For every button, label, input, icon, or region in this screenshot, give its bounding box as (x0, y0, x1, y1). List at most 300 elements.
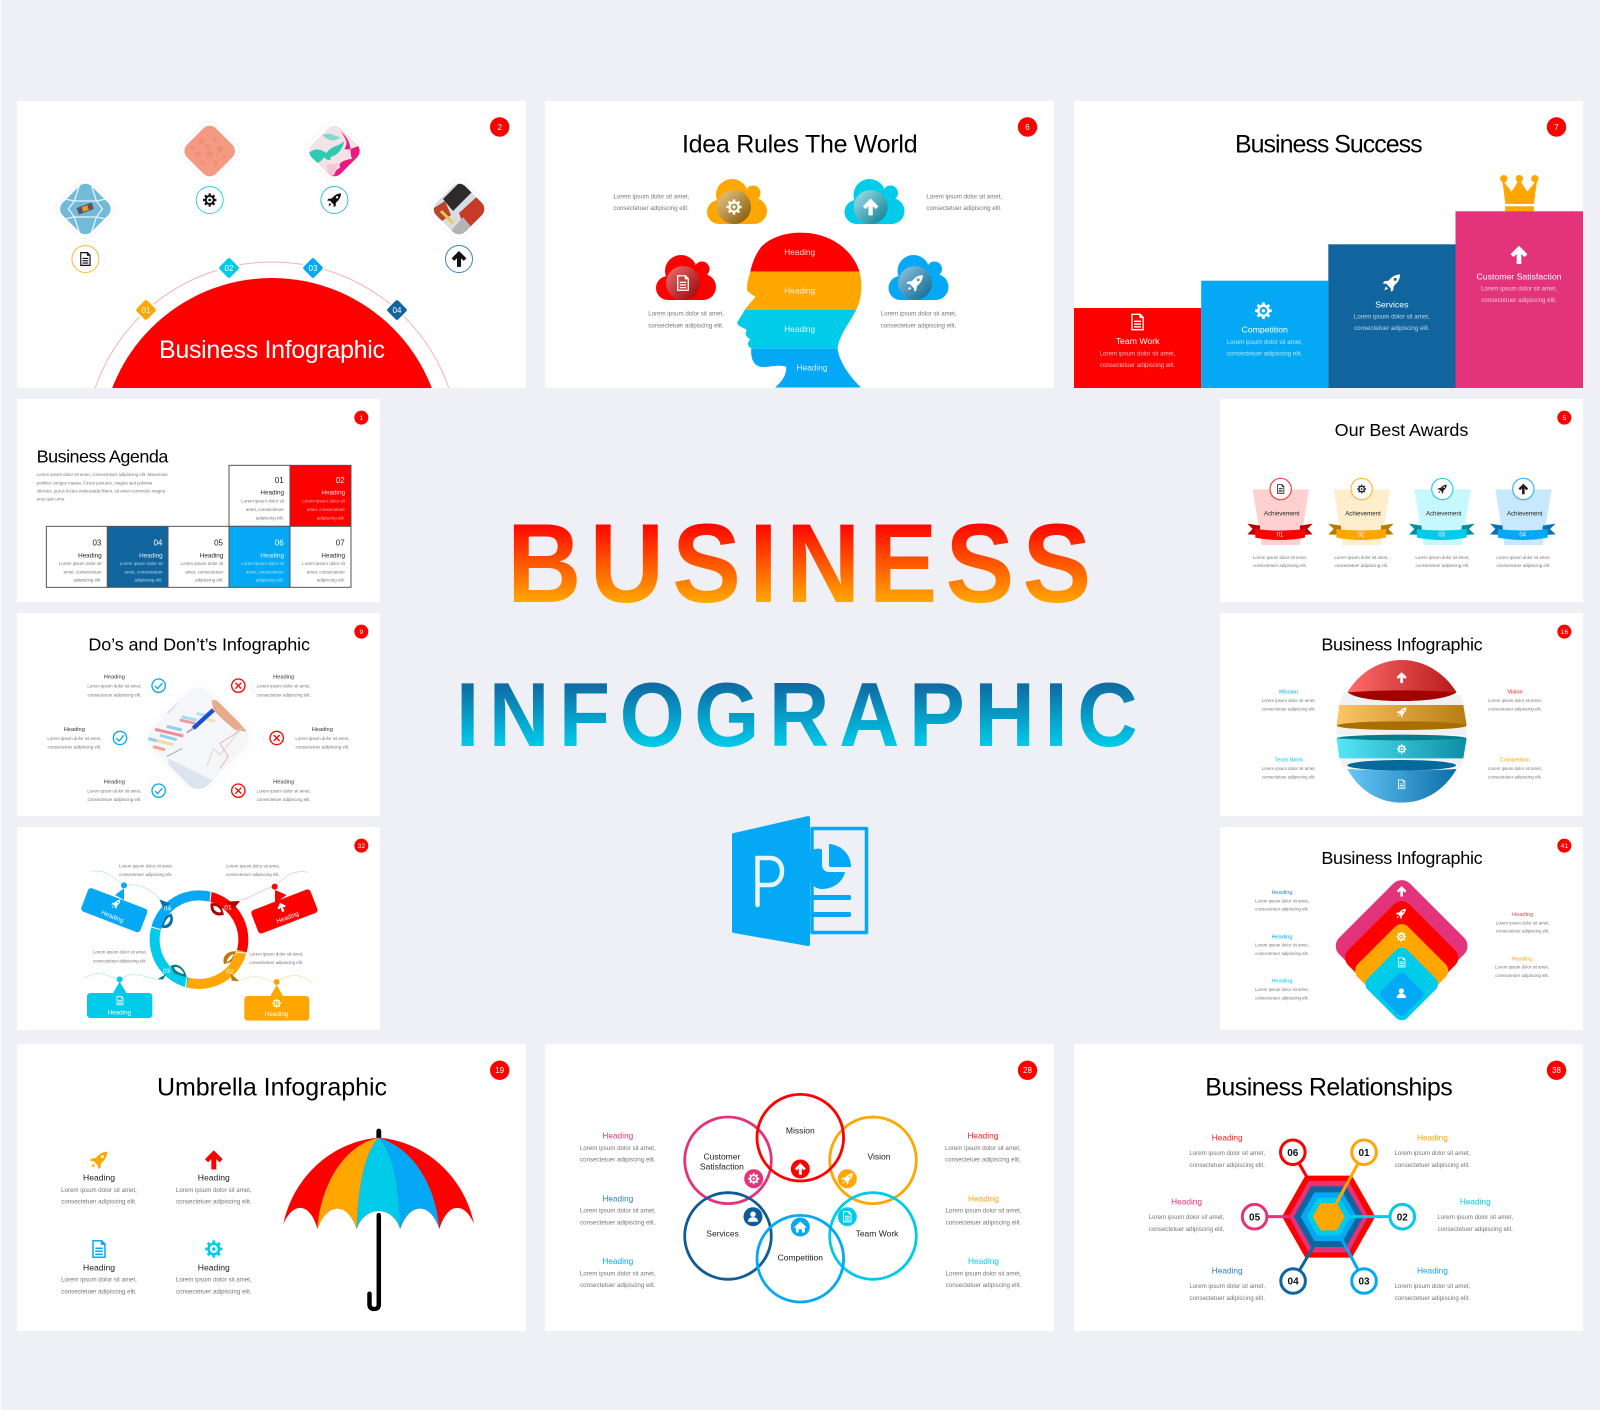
text block: do 2: Lorem ipsum dolor sit amet, (47, 736, 101, 741)
text block: right 1: Heading (967, 1131, 999, 1141)
marker 02: 02 (225, 264, 234, 273)
text block: bottom left: Lorem ipsum dolor sit amet, (648, 311, 724, 318)
text block: bottom right (881, 311, 957, 329)
text block: left 2: consectetuer adipiscing elit. (1255, 951, 1309, 956)
text block: dont 2: consectetuer adipiscing elit. (295, 745, 349, 750)
text block: do 1: Lorem ipsum dolor sit amet, (87, 684, 141, 689)
cell 04 (107, 526, 168, 587)
award 02: consectetuer adipiscing elit. (1334, 563, 1388, 568)
semicircle chart (94, 262, 450, 388)
image: chart paper and pen diamond (144, 684, 252, 792)
award 04: 04 (1519, 533, 1527, 539)
cell 02 (290, 465, 351, 526)
award 03 (1409, 478, 1475, 568)
text block: right 3: Lorem ipsum dolor sit amet, (946, 1270, 1022, 1277)
text block: do 1: consectetuer adipiscing elit. (87, 692, 141, 697)
panel: Business Infographic diamonds (41) (1220, 827, 1583, 1030)
card: cyan doc heading: Heading (108, 1010, 132, 1017)
award 02 (1328, 478, 1394, 568)
cell 01: adipiscing elit. (256, 515, 284, 520)
card: orange gear heading (241, 976, 313, 1021)
badge: 5: 5 (1562, 415, 1566, 422)
step: Team Work: Lorem ipsum dolor sit amet, (1100, 350, 1176, 357)
main title: BUSINESS: BUSINESS (507, 501, 1091, 626)
text block: left 1 (580, 1131, 656, 1164)
umbrella chart (283, 1131, 474, 1309)
text block: orange (1395, 1132, 1471, 1169)
text block: dont 1: Heading (273, 675, 294, 681)
item: gear heading: Heading (198, 1262, 230, 1272)
award 01: consectetuer adipiscing elit. (1253, 563, 1307, 568)
title: Business Infographic (1321, 635, 1483, 655)
icon: gear circle (196, 186, 223, 214)
cell 06: adipiscing elit. (256, 578, 284, 583)
award 01 (1247, 478, 1313, 568)
icon: PowerPoint logo (732, 816, 866, 946)
cell 05: Lorem ipsum dolor sit (180, 561, 224, 566)
ring numbers: 02 (226, 969, 234, 976)
text block: left 1: Heading (1271, 890, 1293, 896)
text block: dont 2: Lorem ipsum dolor sit amet, (295, 736, 349, 741)
text block: left 3: Heading (602, 1256, 634, 1266)
text block: dark blue: Lorem ipsum dolor sit amet, (1189, 1283, 1265, 1290)
award 01: 01 (1277, 533, 1284, 539)
text block: top right: consectetuer adipiscing elit. (226, 872, 280, 877)
cell 03: Heading (78, 552, 102, 559)
text block: top right: Lorem ipsum dolor sit amet, (926, 193, 1002, 200)
marker 03: 03 (309, 264, 318, 273)
text block: right 1: consectetuer adipiscing elit. (1496, 929, 1550, 934)
text block: Team Work: Lorem ipsum dolor sit amet, (1262, 766, 1316, 771)
cell 06: amet, consectetuer (246, 569, 285, 574)
step: Team Work: Team Work (1116, 336, 1160, 346)
panel: Umbrella Infographic (19) (17, 1044, 526, 1331)
text block: left 2: Lorem ipsum dolor sit amet, (1255, 943, 1309, 948)
step: Competition: Lorem ipsum dolor sit amet, (1227, 339, 1303, 346)
badge: 6 (1018, 117, 1037, 137)
item: rocket heading: consectetuer adipiscing elit. (61, 1199, 137, 1206)
text block: Vision: Vision (1507, 690, 1523, 696)
text block: left 2: Heading (602, 1193, 634, 1203)
sphere chart (1337, 660, 1467, 803)
cell 04: Heading (139, 552, 163, 559)
text block: left 2: Lorem ipsum dolor sit amet, (580, 1208, 656, 1215)
badge: 19: 19 (495, 1066, 505, 1075)
text block: Team Work: Team Work (1274, 758, 1303, 764)
step: Services: Services (1375, 299, 1409, 309)
cell 01 (229, 465, 290, 526)
icon: check middle (113, 731, 127, 745)
badge: 6: 6 (1025, 123, 1030, 132)
card: orange gear heading: Heading (265, 1011, 289, 1018)
head labels: Heading (784, 247, 816, 257)
text block: top right (226, 864, 280, 877)
icon: person node (744, 1207, 762, 1226)
title: Do’s and Don’t’s Infographic (88, 635, 310, 655)
award 01: Lorem ipsum dolor sit amet, (1253, 555, 1307, 560)
icon: cross bottom (232, 784, 245, 797)
icon: gear node (744, 1169, 763, 1188)
cell 01: Lorem ipsum dolor sit (241, 499, 285, 504)
text block: pink: Lorem ipsum dolor sit amet, (1149, 1214, 1225, 1221)
text block: blue (1395, 1265, 1471, 1302)
badge: 7 (1547, 117, 1566, 137)
panel: Business Infographic semicircle (2) (17, 101, 526, 388)
main title: INFOGRAPHIC: INFOGRAPHIC (456, 664, 1138, 766)
cell 07: adipiscing elit. (317, 578, 345, 583)
marker 04: 04 (393, 306, 402, 315)
card: cyan doc heading (84, 974, 156, 1018)
text block: bottom left (648, 311, 724, 329)
text block: left 1: Lorem ipsum dolor sit amet, (1255, 898, 1309, 903)
badge: 2: 2 (497, 123, 502, 132)
text block: left 3 (1255, 979, 1309, 1000)
award 04 (1490, 478, 1556, 568)
cell 04: amet, consectetuer (125, 569, 163, 574)
icon: doc node (838, 1207, 857, 1226)
item: rocket heading (61, 1152, 137, 1206)
ring chart (150, 892, 247, 988)
step: Team Work (1074, 308, 1201, 388)
text block: right 2: consectetuer adipiscing elit. (946, 1219, 1022, 1226)
text block: right 2: Heading (968, 1193, 999, 1203)
head chart (737, 232, 862, 388)
text block: left 1: Heading (602, 1131, 634, 1141)
badge: 38 (1547, 1061, 1566, 1080)
text block: blue: Lorem ipsum dolor sit amet, (1395, 1283, 1471, 1290)
step: Competition: consectetuer adipiscing elit. (1227, 351, 1303, 358)
text block: right 1: Lorem ipsum dolor sit amet, (1496, 920, 1550, 925)
text block: right 3: consectetuer adipiscing elit. (946, 1282, 1022, 1289)
item: rocket heading: Heading (83, 1173, 115, 1183)
marker 01: 01 (142, 306, 151, 315)
icon: arrow circle (446, 246, 472, 272)
marker 03 (301, 256, 325, 280)
head labels: Heading (784, 324, 816, 334)
node 05 (1242, 1204, 1267, 1229)
cell 01: amet, consectetuer (246, 507, 285, 512)
award 01: Achievement (1264, 511, 1300, 518)
item: doc heading: consectetuer adipiscing elit. (61, 1288, 137, 1295)
award 03: Lorem ipsum dolor sit amet, (1415, 555, 1469, 560)
cell 03: 03 (92, 538, 102, 547)
text block: pink: consectetuer adipiscing elit. (1149, 1226, 1225, 1233)
venn labels: Mission (786, 1125, 815, 1135)
text block: red: Heading (1212, 1132, 1243, 1142)
paragraph (37, 472, 168, 501)
text block: blue: Heading (1417, 1265, 1448, 1275)
text block: orange: consectetuer adipiscing elit. (1395, 1162, 1470, 1169)
text block: left 2: consectetuer adipiscing elit. (580, 1219, 656, 1226)
text block: left 1: consectetuer adipiscing elit. (580, 1157, 656, 1164)
cell 07 (290, 526, 351, 587)
text block: dont 1: Lorem ipsum dolor sit amet, (257, 684, 311, 689)
badge: 1: 1 (359, 415, 363, 422)
cell 06: Lorem ipsum dolor sit (241, 561, 285, 566)
cell 01: Heading (260, 490, 284, 497)
text block: right 1 (1496, 912, 1550, 934)
panel: Venn circles (28) (545, 1044, 1054, 1331)
item: gear heading: Lorem ipsum dolor sit amet, (176, 1277, 252, 1284)
text block: Team Work (1262, 758, 1316, 779)
text block: red: Lorem ipsum dolor sit amet, (1189, 1150, 1265, 1157)
item: doc heading (61, 1240, 137, 1295)
text block: cyan: Lorem ipsum dolor sit amet, (1437, 1214, 1513, 1221)
text block: cyan: Heading (1460, 1196, 1491, 1206)
text block: left 2 (580, 1193, 656, 1226)
text block: right 2 (1495, 956, 1549, 978)
text block: Team Work: consectetuer adipiscing elit. (1262, 774, 1316, 779)
badge: 32 (354, 839, 368, 853)
node 03: 03 (1358, 1277, 1370, 1288)
text block: dont 3: Lorem ipsum dolor sit amet, (257, 788, 311, 793)
text block: top left (119, 864, 173, 877)
paragraph: porttitor congue massa. Fusce posuere, magna sed pulvinar (37, 480, 153, 485)
item: arrow heading (176, 1151, 252, 1206)
text block: Competition: consectetuer adipiscing elit. (1488, 774, 1542, 779)
text block: pink: Heading (1171, 1196, 1202, 1206)
step: Customer Satisfaction (1456, 211, 1583, 388)
text block: top left: Lorem ipsum dolor sit amet, (613, 193, 689, 200)
icon: home node (791, 1218, 810, 1236)
badge: 5 (1557, 411, 1571, 425)
item: arrow heading: Lorem ipsum dolor sit amet, (176, 1187, 252, 1194)
cell 06 (229, 526, 290, 587)
icon: doc circle (72, 246, 99, 272)
text block: right 1 (945, 1131, 1021, 1164)
badge: 19 (490, 1061, 509, 1080)
text block: Mission: consectetuer adipiscing elit. (1262, 706, 1316, 711)
text block: left 2 (1255, 934, 1309, 956)
text block: right 3 (946, 1256, 1022, 1289)
node 06: 06 (1287, 1148, 1299, 1159)
text block: left 2: Heading (1271, 934, 1293, 940)
item: arrow heading: consectetuer adipiscing elit. (176, 1199, 252, 1206)
panel: Idea Rules The World (6) (545, 101, 1054, 389)
panel: Business Success (7) (1074, 101, 1583, 388)
paragraph: ultricies, purus lectus malesuada libero, sit amet commodo magna (37, 488, 166, 493)
image: blue tile diamond (55, 179, 116, 239)
cell 05: Heading (200, 552, 224, 559)
node 06 (1280, 1140, 1305, 1165)
badge: 38: 38 (1552, 1066, 1561, 1075)
text block: right 3: Heading (968, 1256, 999, 1266)
text block: pink (1149, 1196, 1225, 1233)
award 04: Achievement (1507, 511, 1543, 518)
text block: left 3: Lorem ipsum dolor sit amet, (580, 1270, 656, 1277)
ring loop details (157, 899, 240, 981)
text block: top left: consectetuer adipiscing elit. (119, 872, 173, 877)
step: Competition: Competition (1242, 325, 1288, 335)
award 02: 02 (1358, 533, 1365, 539)
badge: 32: 32 (358, 843, 365, 850)
step: Services (1328, 244, 1456, 388)
text block: dont 1 (257, 675, 311, 697)
title: Business Relationships (1205, 1074, 1453, 1102)
text block: left 1 (1255, 890, 1309, 912)
text block: left 1: consectetuer adipiscing elit. (1255, 907, 1309, 912)
icon: cyan cloud (844, 179, 904, 224)
venn labels: Vision (868, 1151, 891, 1161)
cell 03 (46, 526, 107, 587)
cell 07: Heading (321, 552, 345, 559)
node 02: 02 (1397, 1212, 1408, 1223)
text block: dont 3 (257, 779, 311, 802)
step: Customer Satisfaction: consectetuer adipiscing elit. (1481, 297, 1557, 304)
icon: crown (1500, 175, 1539, 211)
cell 02: Lorem ipsum dolor sit (302, 499, 346, 504)
panel: Business Infographic sphere (16) (1220, 613, 1583, 816)
node 05: 05 (1249, 1212, 1261, 1223)
step: Customer Satisfaction: Customer Satisfaction (1477, 271, 1562, 281)
badge: 28 (1018, 1061, 1037, 1080)
node 01 (1352, 1140, 1376, 1165)
text block: left 3 (580, 1256, 656, 1289)
heading: Business Infographic: Business Infographic (159, 336, 385, 364)
text block: left 3: consectetuer adipiscing elit. (580, 1282, 656, 1289)
text block: right 1: Heading (1512, 912, 1533, 918)
icon: arrow node (791, 1160, 810, 1178)
text block: left 3: Lorem ipsum dolor sit amet, (1255, 987, 1309, 992)
venn labels: Competition (778, 1253, 823, 1263)
item: gear heading (176, 1240, 252, 1295)
venn labels: Team Work (856, 1229, 899, 1239)
card: blue rocket heading: Heading (100, 909, 125, 925)
icon: cross top (232, 679, 245, 692)
head labels: Heading (784, 285, 816, 295)
text block: do 2: Heading (64, 727, 85, 733)
venn chart (685, 1094, 916, 1302)
text block: right 2: Lorem ipsum dolor sit amet, (1495, 965, 1549, 970)
icon: rocket node (838, 1169, 857, 1188)
head labels (784, 247, 828, 373)
text block: Mission (1262, 690, 1316, 711)
image: salmon texture diamond (180, 121, 240, 181)
badge: 28: 28 (1023, 1066, 1032, 1075)
text block: bottom left: consectetuer adipiscing elit. (93, 958, 147, 963)
step: Competition (1201, 281, 1328, 388)
cell 05: amet, consectetuer (185, 569, 224, 574)
item: doc heading: Heading (83, 1262, 115, 1272)
badge: 7: 7 (1554, 123, 1559, 132)
paragraph: eros quis urna. (37, 496, 65, 501)
text block: Vision (1488, 690, 1542, 711)
title: Umbrella Infographic (157, 1074, 387, 1102)
text block: Vision: Lorem ipsum dolor sit amet, (1488, 698, 1542, 703)
cell 02: amet, consectetuer (307, 507, 345, 512)
text block: do 3: Lorem ipsum dolor sit amet, (87, 788, 141, 793)
text block: red: consectetuer adipiscing elit. (1189, 1162, 1265, 1169)
cell 04: Lorem ipsum dolor sit (120, 561, 163, 566)
badge: 9: 9 (359, 629, 363, 636)
icon: red cloud (656, 255, 716, 300)
item: rocket heading: Lorem ipsum dolor sit amet, (61, 1187, 137, 1194)
cell 07: Lorem ipsum dolor sit (302, 561, 346, 566)
cell 06: 06 (275, 538, 284, 547)
cell 02: adipiscing elit. (317, 515, 345, 520)
text block: right 1: Lorem ipsum dolor sit amet, (945, 1145, 1021, 1152)
text block: top left (613, 193, 689, 212)
cell 07: amet, consectetuer (307, 569, 345, 574)
text block: left 3: consectetuer adipiscing elit. (1255, 995, 1309, 1000)
text block: dark blue (1189, 1265, 1265, 1302)
card: blue rocket heading (80, 871, 160, 933)
text block: bottom right: consectetuer adipiscing elit. (249, 960, 303, 965)
text block: do 3 (87, 779, 141, 802)
award 03: consectetuer adipiscing elit. (1415, 563, 1469, 568)
icon: check bottom (152, 784, 165, 797)
text block: orange: Heading (1417, 1132, 1448, 1142)
title: Business Success (1235, 131, 1423, 159)
award 03: 03 (1438, 533, 1446, 539)
ring numbers (163, 905, 234, 976)
text block: cyan: consectetuer adipiscing elit. (1438, 1226, 1513, 1233)
node 02 (1390, 1204, 1415, 1229)
cell 04: adipiscing elit. (134, 578, 163, 583)
text block: right 2: Heading (1511, 956, 1533, 962)
image: marble diamond (304, 121, 364, 181)
badge: 16: 16 (1561, 629, 1568, 636)
cell 05: 05 (214, 538, 224, 547)
text block: top right (926, 193, 1002, 212)
text block: Mission: Lorem ipsum dolor sit amet, (1262, 698, 1316, 703)
hexagon chart (1255, 1152, 1402, 1281)
badge: 41: 41 (1561, 843, 1568, 850)
text block: bottom left: consectetuer adipiscing elit. (648, 322, 724, 329)
text block: do 1: Heading (104, 675, 125, 681)
text block: cyan (1437, 1196, 1513, 1233)
card: red arrow heading (242, 872, 318, 935)
badge: 1 (354, 411, 368, 425)
cell 07: 07 (336, 538, 345, 547)
text block: top left: Lorem ipsum dolor sit amet, (119, 864, 173, 869)
cell 05: adipiscing elit. (195, 578, 223, 583)
award 04: consectetuer adipiscing elit. (1496, 563, 1550, 568)
node 01: 01 (1358, 1148, 1370, 1159)
item: arrow heading: Heading (198, 1173, 230, 1183)
text block: dont 2 (295, 727, 349, 750)
badge: 2 (490, 117, 509, 137)
title: Idea Rules The World (682, 131, 918, 159)
text block: do 3: Heading (104, 779, 125, 785)
text block: dark blue: Heading (1212, 1265, 1243, 1275)
award 04: Lorem ipsum dolor sit amet, (1496, 555, 1550, 560)
icon: cross middle (270, 731, 283, 745)
award 02: Lorem ipsum dolor sit amet, (1334, 555, 1388, 560)
text block: dont 3: Heading (273, 779, 294, 785)
image: red panels diamond (429, 179, 489, 239)
cell 02: 02 (336, 476, 345, 485)
node 03 (1352, 1269, 1376, 1293)
title: Business Infographic (1321, 848, 1483, 868)
ring numbers: 04 (164, 905, 171, 912)
text block: Competition: Competition (1500, 758, 1530, 764)
venn labels: Satisfaction (700, 1161, 744, 1171)
item: doc heading: Lorem ipsum dolor sit amet, (61, 1277, 137, 1284)
text block: bottom right (249, 952, 303, 965)
text block: bottom right: Lorem ipsum dolor sit amet, (881, 311, 957, 318)
cell 03: amet, consectetuer (64, 569, 102, 574)
item: gear heading: consectetuer adipiscing elit. (176, 1288, 252, 1295)
text block: do 2: consectetuer adipiscing elit. (47, 745, 101, 750)
step: Customer Satisfaction: Lorem ipsum dolor sit amet, (1481, 285, 1557, 292)
badge: 41 (1557, 839, 1571, 853)
step: Services: consectetuer adipiscing elit. (1354, 325, 1430, 332)
icon: blue cloud (888, 255, 948, 300)
text block: dark blue: consectetuer adipiscing elit. (1189, 1295, 1265, 1302)
text block: orange: Lorem ipsum dolor sit amet, (1395, 1150, 1471, 1157)
text block: Vision: consectetuer adipiscing elit. (1488, 706, 1542, 711)
